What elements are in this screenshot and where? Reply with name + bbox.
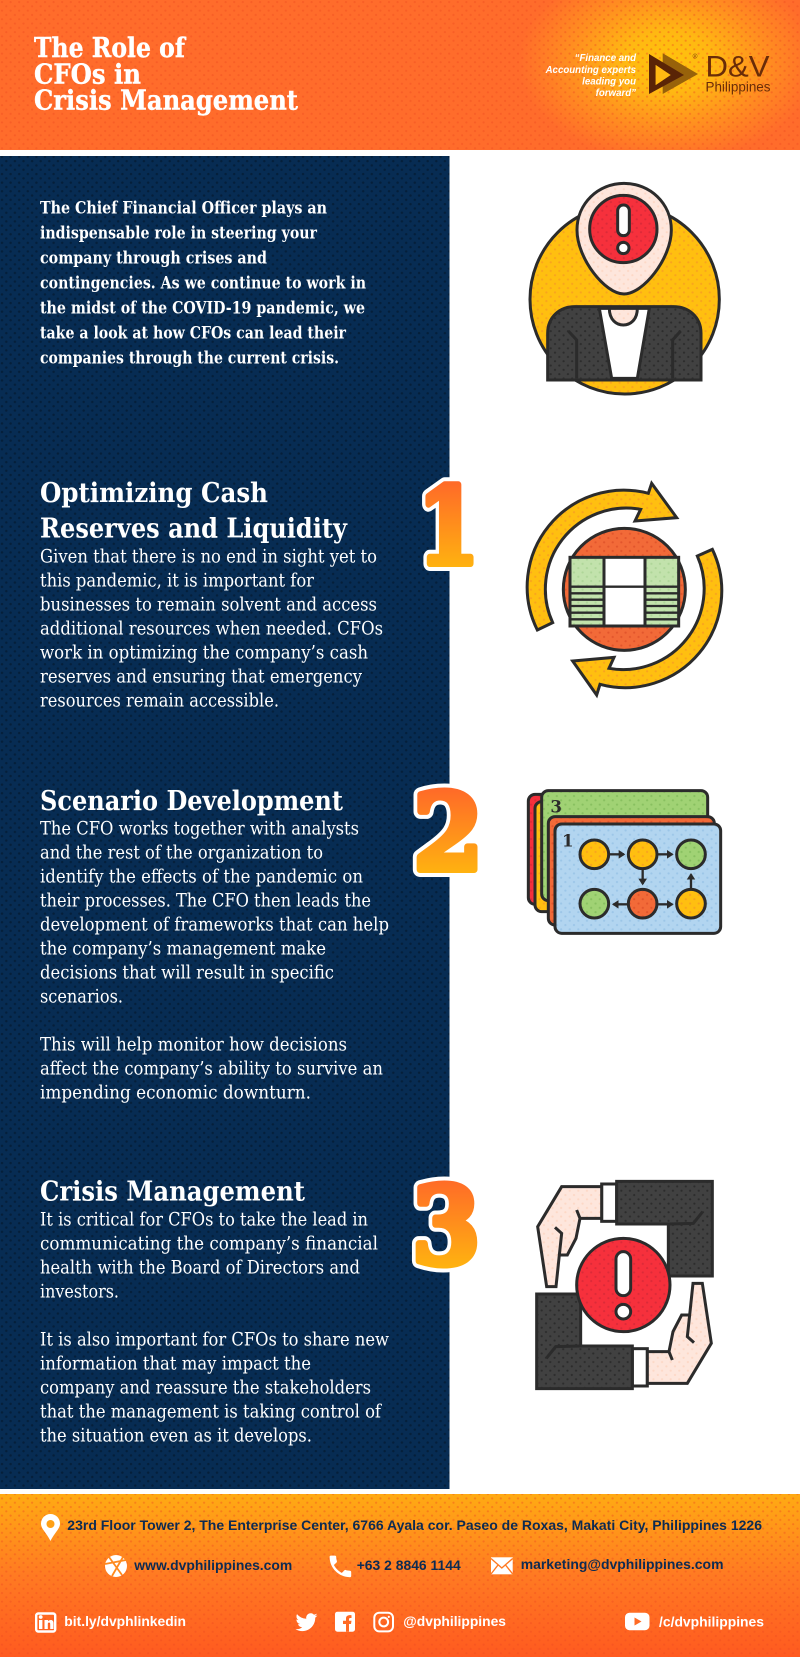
linkedin url: bit.ly/dvphlinkedin [64,1613,186,1629]
heading: optimizing cash [40,477,348,545]
body: optimizing cash: businesses to remain solvent and access [40,593,377,615]
hand: top right [538,1181,712,1287]
number 1: 1 [418,464,480,588]
icon: twitter [296,1613,318,1631]
footer banner [0,1494,800,1657]
body: crisis management: health with the Board of Directors and [40,1256,360,1278]
body: scenario development: their processes. The CFO then leads the [40,889,371,911]
body: crisis management: the situation even as it develops. [40,1424,312,1446]
body: scenario development: decisions that will result in specific [40,961,334,983]
section 2: heading and body [40,785,389,1103]
body: crisis management: that the management is taking control of [40,1400,383,1422]
body: optimizing cash: resources remain accessible. [40,689,279,711]
instagram and twitter handle: @dvphilippines [403,1613,506,1629]
section 3: heading and body [40,1176,390,1446]
logo: D&V Philippines: D&V [706,51,770,84]
logo: D&V Philippines: ® [693,52,698,60]
body: scenario development: identify the effects of the pandemic on [40,865,363,887]
body: scenario development: This will help monitor how decisions [40,1033,347,1055]
address: 23rd Floor Tower 2, The Enterprise Center, 6766 Ayala cor. Paseo de Roxas, Makati City, Philippines 1226 [67,1517,762,1533]
number 3: 3 [412,1164,480,1290]
icon: hands around alert [537,1181,712,1389]
body: optimizing cash: reserves and ensuring that emergency [40,665,362,687]
heading: scenario development: Scenario Development [40,785,343,817]
intro text: the midst of the COVID-19 pandemic, we [40,299,365,318]
heading: optimizing cash: Optimizing Cash [40,477,268,509]
body: scenario development: scenarios. [40,985,123,1007]
body: optimizing cash: Given that there is no end in sight yet to [40,545,377,567]
body: optimizing cash [40,545,383,711]
website: www.dvphilippines.com [133,1557,292,1573]
heading: optimizing cash: Reserves and Liquidity [40,513,348,545]
body: crisis management: investors. [40,1280,119,1302]
icon: scenario cards: 3 [550,797,562,817]
title: The Role of [34,32,187,64]
youtube url: /c/dvphilippines [659,1614,764,1630]
icon: executive with alert head [530,183,719,394]
intro text: company through crises and [40,248,267,268]
intro text: take a look at how CFOs can lead their [40,324,346,343]
logo: D&V Philippines: Philippines [706,80,770,96]
body: scenario development: impending economic downturn. [40,1081,311,1103]
email: marketing@dvphilippines.com [521,1556,724,1572]
title [34,32,298,116]
intro text: companies through the current crisis. [40,349,339,368]
icon: facebook [335,1612,355,1632]
title: Crisis Management [34,84,298,116]
intro text: contingencies. As we continue to work in [40,274,366,293]
intro text: The Chief Financial Officer plays an [40,198,327,218]
header banner [0,0,800,150]
icon: scenario cards: 1 [562,830,574,850]
icon: phone [330,1556,351,1577]
body: optimizing cash: additional resources when needed. CFOs [40,617,383,639]
number 2: 2 [413,770,483,894]
icon: youtube [625,1613,650,1630]
body: scenario development: and the rest of the organization to [40,841,323,863]
logo: D&V Philippines [649,51,770,96]
section 1: heading and body [40,477,383,711]
number 2: 2 [413,770,483,894]
body: scenario development: development of frameworks that can help [40,913,389,935]
body: crisis management: It is also important for CFOs to share new [40,1328,390,1350]
intro text: indispensable role in steering your [40,224,317,243]
icon: location pin [41,1514,60,1541]
icon: mail [491,1557,513,1574]
title: CFOs in [34,58,141,90]
heading: crisis management: Crisis Management [40,1176,305,1208]
icon: instagram [374,1613,393,1631]
intro text [40,198,366,368]
tagline: Accounting experts [545,65,637,76]
alert circle [577,1238,670,1332]
body: optimizing cash: work in optimizing the company’s cash [40,641,368,663]
icon: cash cycle arrows [527,483,722,695]
icon: linkedin [36,1614,55,1632]
phone number: +63 2 8846 1144 [357,1557,461,1573]
icon: website globe [105,1555,127,1577]
tagline: “Finance and [575,53,637,64]
body: crisis management: company and reassure the stakeholders [40,1376,371,1398]
tagline: leading you [582,76,636,88]
icon: scenario cards [528,791,721,933]
tagline [545,53,637,99]
body: scenario development: The CFO works together with analysts [40,817,359,839]
body: crisis management: communicating the company’s financial [40,1232,378,1254]
body: crisis management [40,1208,390,1446]
number 1: 1 [418,464,480,588]
body: scenario development [40,817,389,1103]
navy content panel [0,156,450,1489]
body: optimizing cash: this pandemic, it is important for [40,569,315,591]
tagline: forward” [596,88,636,99]
body: crisis management: information that may impact the [40,1352,311,1374]
hand: bottom left [537,1283,711,1389]
body: scenario development: affect the company’s ability to survive an [40,1057,383,1079]
body: crisis management: It is critical for CFOs to take the lead in [40,1208,368,1230]
body: scenario development: the company’s management make [40,937,326,959]
number 3: 3 [412,1164,480,1290]
